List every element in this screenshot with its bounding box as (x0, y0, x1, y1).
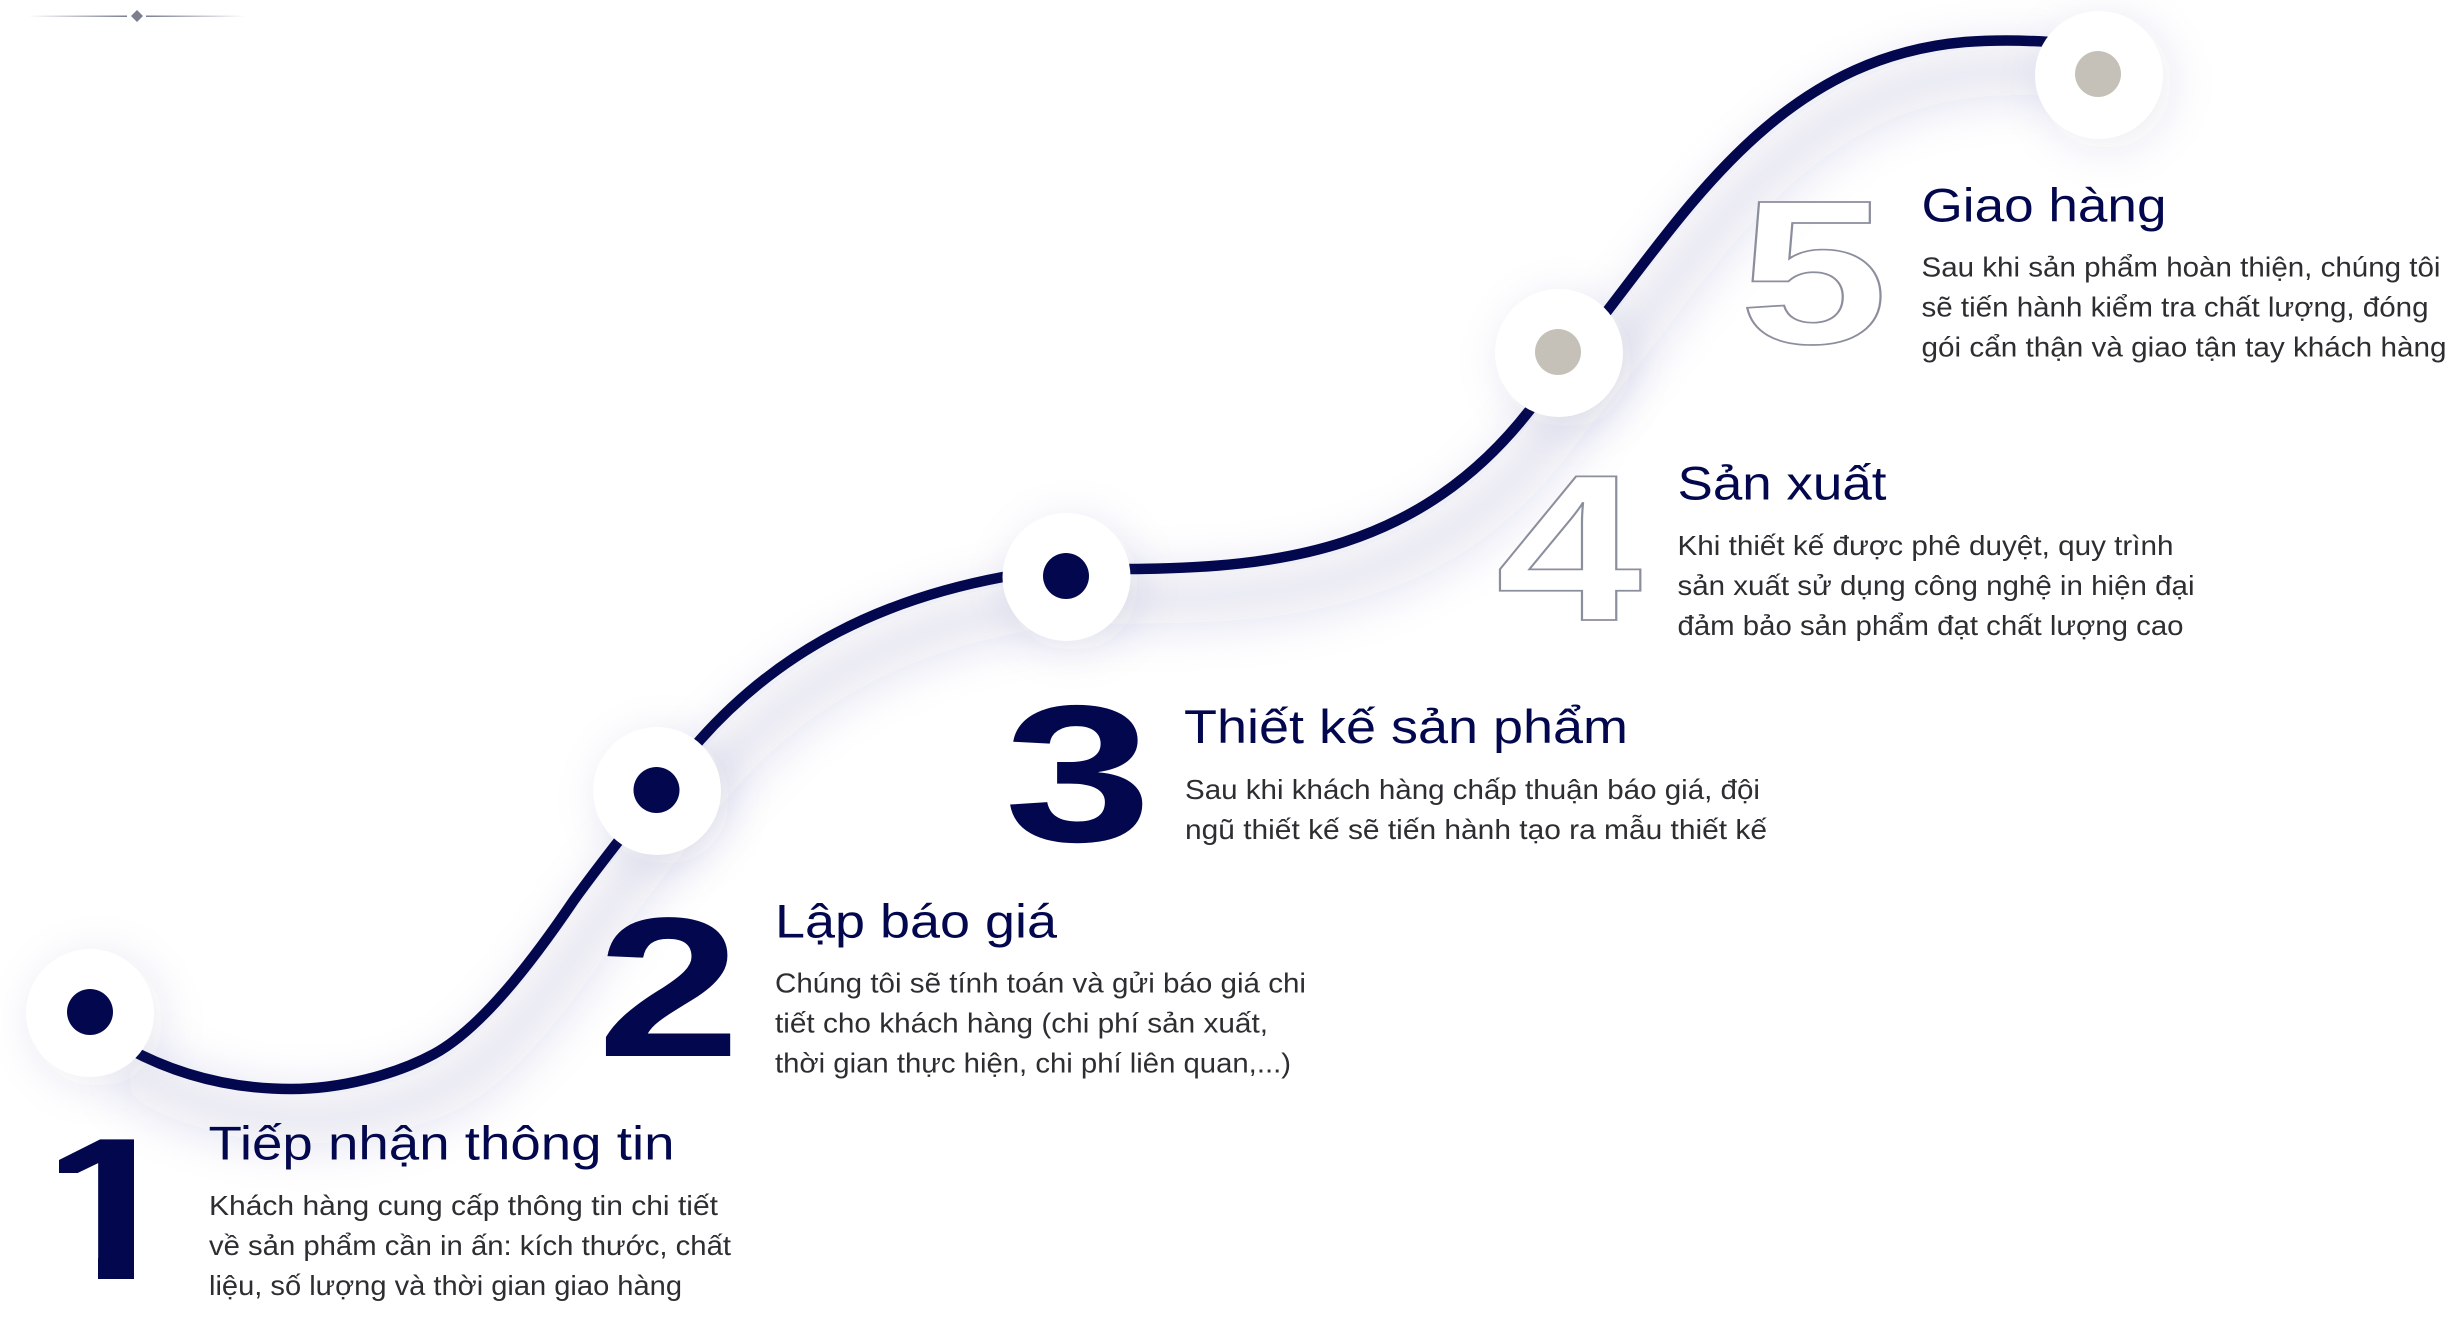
description: step 3 (1185, 774, 1767, 845)
curve shadow (128, 70, 2068, 1119)
heading: step 3: Thiết kế sản phẩm (1184, 700, 1628, 753)
ornament: top-left divider (28, 10, 245, 22)
description: step 1: liệu, số lượng và thời gian giao hàng (209, 1270, 682, 1301)
node 1 (26, 949, 163, 1087)
description: step 4: sản xuất sử dụng công nghệ in hiện đại (1678, 570, 2194, 601)
node 4 (1495, 289, 1632, 428)
description: step 4: Khi thiết kế được phê duyệt, quy trình (1678, 530, 2174, 561)
number 2: 2 (597, 876, 741, 1098)
description: step 5: gói cẩn thận và giao tận tay khách hàng (1922, 332, 2446, 362)
number 1: 1 (37, 1095, 183, 1322)
description: step 2: Chúng tôi sẽ tính toán và gửi báo giá chi (775, 968, 1306, 998)
description: step 2: tiết cho khách hàng (chi phí sản xuất, (775, 1008, 1268, 1038)
description: step 1: về sản phẩm cần in ấn: kích thước, chất (209, 1230, 731, 1261)
description: step 5 (1922, 252, 2446, 362)
node 5 (2035, 11, 2172, 149)
step 3 (1004, 665, 1767, 883)
step 2 (597, 876, 1306, 1098)
description: step 4: đảm bảo sản phẩm đạt chất lượng cao (1678, 610, 2184, 641)
description: step 3: Sau khi khách hàng chấp thuận báo giá, đội (1185, 774, 1760, 805)
heading: step 5: Giao hàng (1922, 178, 2166, 232)
node 3 (1002, 513, 1139, 651)
number 5 outlined: 5 (1739, 157, 1888, 387)
description: step 5: Sau khi sản phẩm hoàn thiện, chúng tôi (1922, 252, 2440, 282)
number 4 outlined: 4 (1496, 432, 1642, 665)
description: step 1: Khách hàng cung cấp thông tin chi tiết (209, 1190, 718, 1221)
description: step 1 (209, 1190, 731, 1301)
description: step 2 (775, 968, 1306, 1078)
number 3: 3 (1004, 665, 1152, 883)
heading: step 1: Tiếp nhận thông tin (208, 1116, 674, 1170)
description: step 3: ngũ thiết kế sẽ tiến hành tạo ra mẫu thiết kế (1185, 814, 1767, 845)
description: step 2: thời gian thực hiện, chi phí liên quan,...) (775, 1048, 1291, 1078)
heading: step 2: Lập báo giá (775, 894, 1058, 948)
step 5 (1739, 157, 2446, 387)
description: step 5: sẽ tiến hành kiểm tra chất lượng, đóng (1922, 292, 2428, 322)
heading: step 4: Sản xuất (1678, 456, 1886, 510)
step 1 (59, 1123, 731, 1301)
node 2 (593, 727, 730, 865)
step 4 (1496, 432, 2194, 665)
timeline curve (110, 40, 2050, 1089)
description: step 4 (1678, 530, 2194, 641)
